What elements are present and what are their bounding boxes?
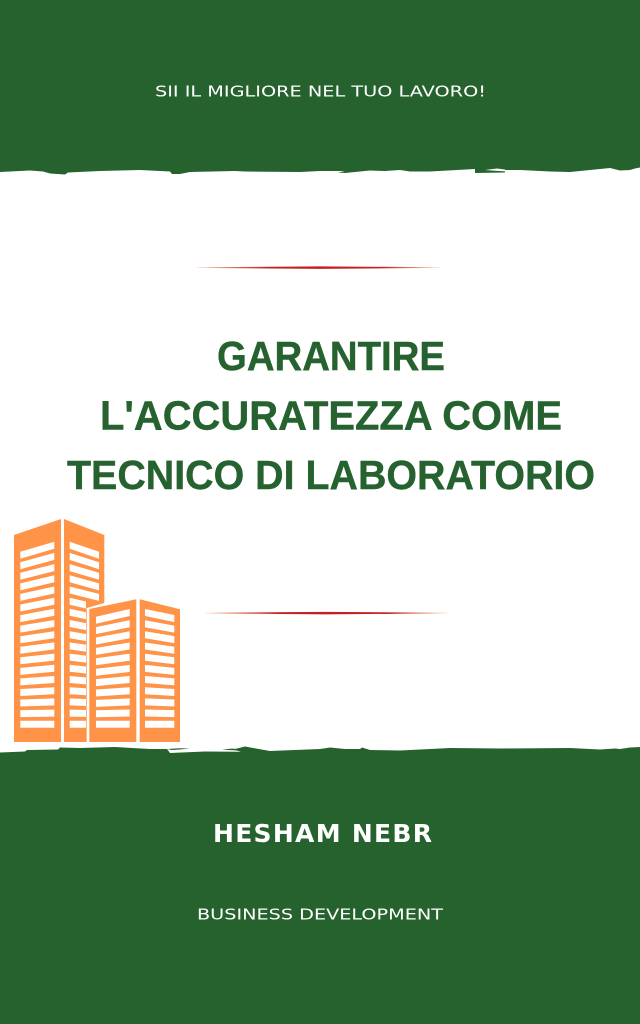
bottom green brush band (0, 746, 640, 1024)
tall tower (14, 519, 104, 742)
white tear in top band (485, 168, 507, 172)
top green brush band (0, 0, 640, 174)
author role: BUSINESS DEVELOPMENT (197, 906, 444, 924)
title line 1: GARANTIRE (217, 333, 445, 379)
lower red divider (205, 612, 448, 614)
icon: office buildings (14, 519, 180, 742)
title (67, 333, 595, 498)
green sliver (222, 749, 238, 750)
green sliver (167, 748, 190, 750)
title line 2: L'ACCURATEZZA COME (100, 392, 562, 438)
title line 3: TECNICO DI LABORATORIO (67, 452, 595, 498)
short tower (89, 599, 180, 742)
author name: HESHAM NEBR (213, 819, 432, 848)
upper red divider (197, 266, 440, 269)
windows (20, 542, 174, 728)
tagline: SII IL MIGLIORE NEL TUO LAVORO! (155, 82, 486, 100)
